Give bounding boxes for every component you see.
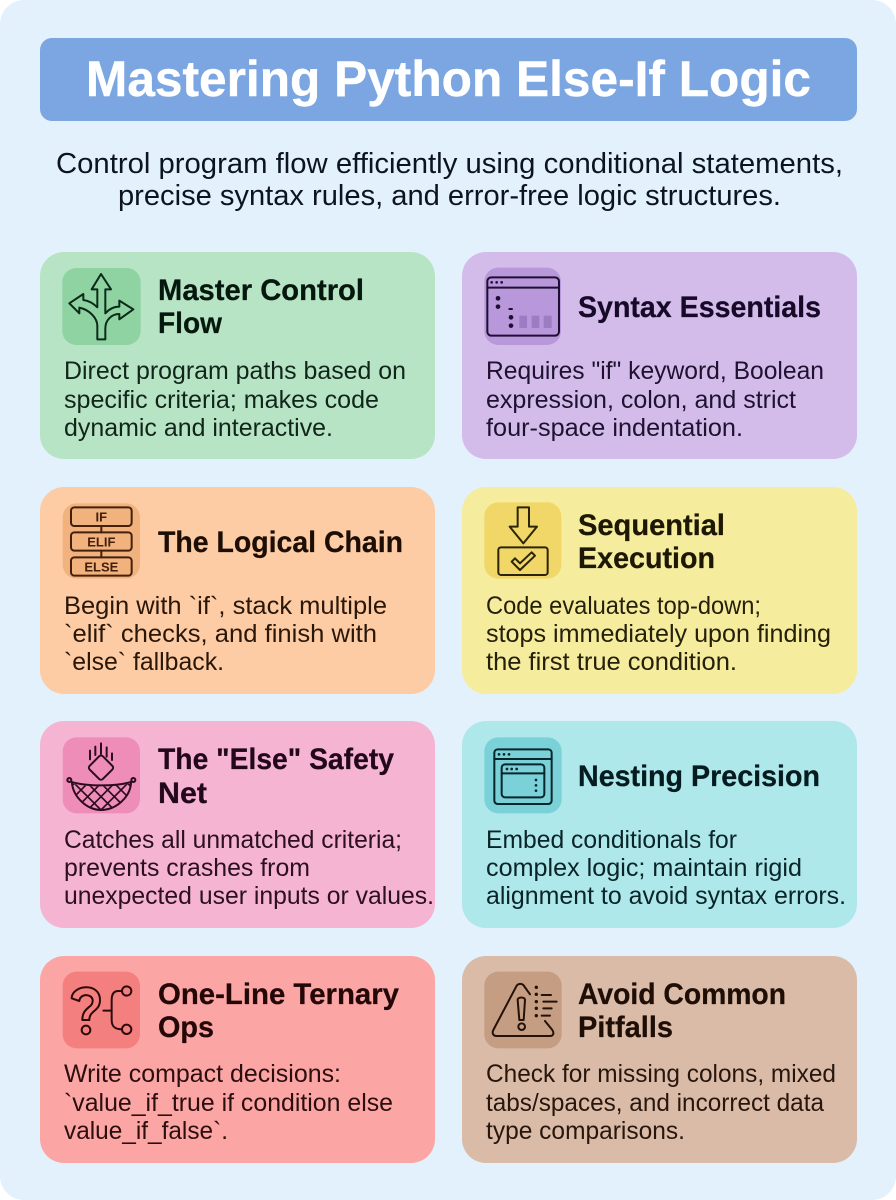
body text: `else` fallback. bbox=[64, 648, 224, 676]
body text bbox=[64, 357, 406, 442]
body text: Code evaluates top-down; bbox=[486, 592, 761, 620]
title banner: Mastering Python Else-If Logic bbox=[86, 51, 811, 107]
body text: Direct program paths based on bbox=[64, 357, 406, 385]
icon: nested windows bbox=[484, 737, 562, 813]
body text: value_if_false`. bbox=[64, 1117, 228, 1145]
body text: expression, colon, and strict bbox=[486, 386, 796, 414]
body text bbox=[486, 592, 831, 676]
body text: Check for missing colons, mixed bbox=[486, 1060, 836, 1088]
heading: One-Line Ternary bbox=[158, 978, 399, 1011]
heading: Execution bbox=[578, 542, 715, 575]
body text: tabs/spaces, and incorrect data bbox=[486, 1089, 824, 1117]
body text bbox=[486, 1060, 836, 1145]
panel: nesting precision bbox=[462, 721, 857, 928]
body text: stops immediately upon finding bbox=[486, 620, 831, 648]
body text: Embed conditionals for bbox=[486, 826, 737, 854]
icon: question mark with branches bbox=[63, 972, 140, 1048]
heading bbox=[158, 743, 394, 810]
heading bbox=[578, 978, 786, 1044]
body text: Begin with `if`, stack multiple bbox=[64, 592, 387, 620]
panel: the else safety net bbox=[40, 721, 435, 928]
subtitle: precise syntax rules, and error-free logic structures. bbox=[118, 180, 781, 212]
subtitle bbox=[56, 148, 843, 212]
heading: Pitfalls bbox=[578, 1011, 673, 1044]
heading: Syntax Essentials bbox=[578, 291, 821, 324]
panel: master control flow bbox=[40, 252, 435, 459]
body text: specific criteria; makes code bbox=[64, 386, 379, 414]
icon: if elif else stack bbox=[63, 503, 140, 579]
body text bbox=[64, 1060, 393, 1145]
body text: prevents crashes from bbox=[64, 854, 310, 882]
body text: the first true condition. bbox=[486, 648, 737, 676]
body text: four-space indentation. bbox=[486, 414, 743, 442]
heading bbox=[158, 978, 399, 1044]
body text: Catches all unmatched criteria; bbox=[64, 826, 402, 854]
heading: Sequential bbox=[578, 509, 725, 542]
heading: Flow bbox=[158, 307, 223, 340]
icon: if elif else stack: ELSE bbox=[84, 560, 119, 575]
body text: Requires "if" keyword, Boolean bbox=[486, 357, 824, 385]
body text: unexpected user inputs or values. bbox=[64, 882, 434, 910]
heading bbox=[578, 509, 725, 575]
body text: dynamic and interactive. bbox=[64, 414, 333, 442]
heading bbox=[158, 274, 364, 340]
panel: sequential execution bbox=[462, 487, 857, 694]
body text: Write compact decisions: bbox=[64, 1060, 341, 1088]
title banner bbox=[40, 38, 857, 121]
icon: if elif else stack: IF bbox=[96, 509, 107, 524]
icon: warning triangle bbox=[484, 972, 562, 1048]
heading: Nesting Precision bbox=[578, 760, 820, 793]
body text: complex logic; maintain rigid bbox=[486, 854, 802, 882]
icon: branching arrows bbox=[62, 268, 141, 345]
body text bbox=[486, 826, 846, 910]
heading: Ops bbox=[158, 1011, 214, 1044]
panel: syntax essentials bbox=[462, 252, 857, 459]
panel: the logical chain bbox=[40, 487, 435, 694]
heading: Master Control bbox=[158, 274, 364, 307]
body text: `value_if_true if condition else bbox=[64, 1089, 393, 1117]
heading: Avoid Common bbox=[578, 978, 786, 1011]
body text: alignment to avoid syntax errors. bbox=[486, 882, 846, 910]
icon: down arrow into check box bbox=[484, 502, 561, 579]
body text bbox=[64, 592, 387, 676]
panel: avoid common pitfalls bbox=[462, 956, 857, 1163]
icon: diamond falling into net bbox=[62, 737, 140, 814]
heading: Net bbox=[158, 777, 207, 810]
body text bbox=[64, 826, 434, 910]
heading: The Logical Chain bbox=[158, 526, 403, 559]
body text bbox=[486, 357, 824, 442]
body text: `elif` checks, and finish with bbox=[64, 620, 377, 648]
body text: type comparisons. bbox=[486, 1117, 685, 1145]
icon: code window bbox=[484, 268, 561, 345]
subtitle: Control program flow efficiently using conditional statements, bbox=[56, 148, 843, 180]
heading: The "Else" Safety bbox=[158, 743, 394, 776]
panel: one-line ternary ops bbox=[40, 956, 435, 1163]
icon: if elif else stack: ELIF bbox=[87, 535, 115, 550]
